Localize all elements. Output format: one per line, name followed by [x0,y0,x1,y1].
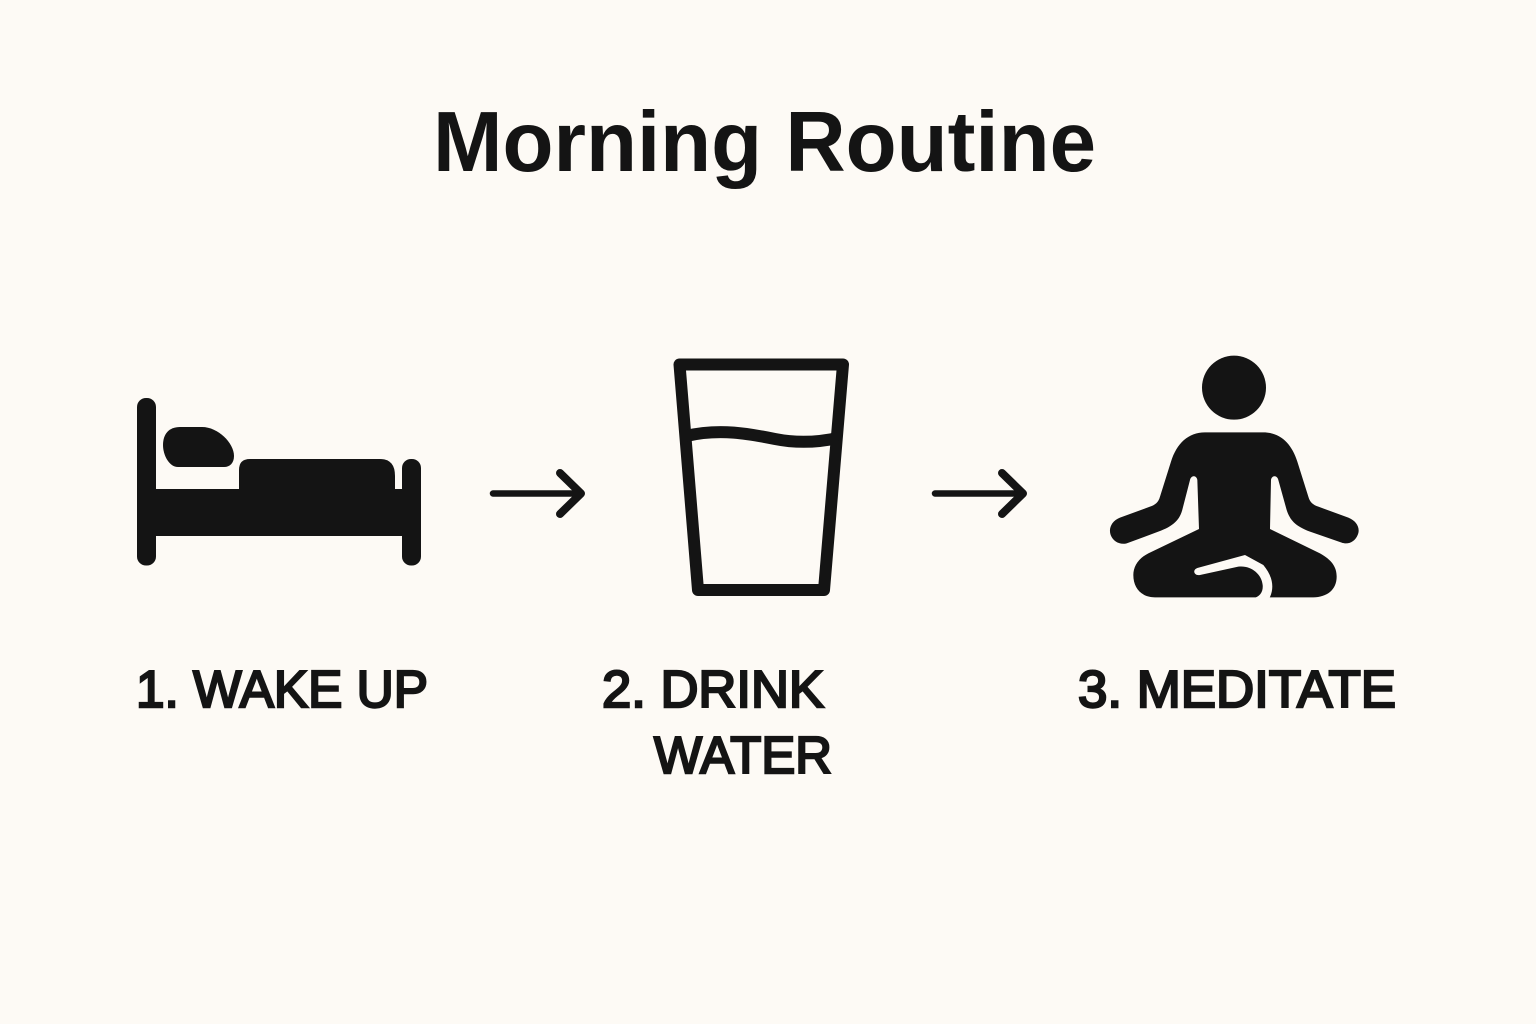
label: 2. drink water: WATER [654,727,832,785]
step 3: meditate [1078,356,1396,719]
step 1: wake up [136,398,428,719]
label: 2. drink water [602,661,832,785]
step 2: drink water [602,364,843,785]
arrow: step 2 to step 3 [935,473,1023,514]
arrow: step 1 to step 2 [493,473,581,514]
icon: meditating person [1110,356,1359,598]
label: 3. meditate: 3. MEDITATE [1078,661,1396,719]
label: 2. drink water: 2. DRINK [602,661,824,719]
icon: bed [137,398,421,566]
icon: glass of water [680,364,843,590]
title: Morning Routine [433,95,1096,190]
label: 1. wake up: 1. WAKE UP [136,661,428,719]
